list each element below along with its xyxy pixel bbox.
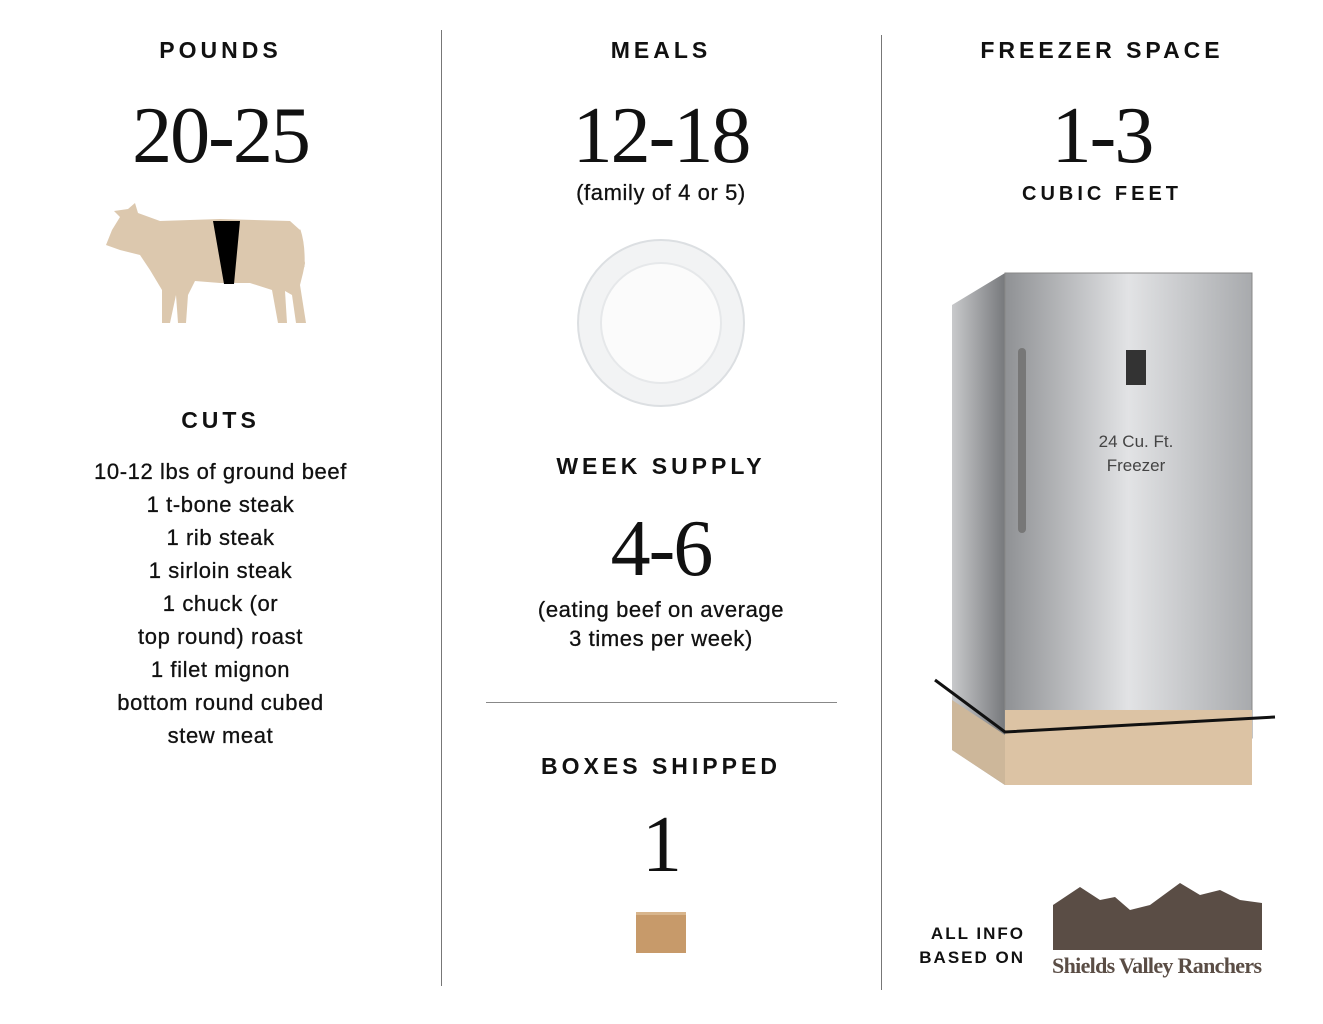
text: all info based on	[919, 924, 1025, 967]
heading: meals: MEALS	[611, 37, 711, 63]
icon: box	[636, 912, 686, 953]
text: all info based on: BASED ON	[919, 948, 1025, 967]
text: cuts list	[94, 459, 347, 748]
heading: freezer space: FREEZER SPACE	[980, 37, 1224, 63]
number: meals: 12-18	[573, 92, 749, 180]
logo: shields valley ranchers	[1052, 883, 1262, 978]
number: freezer: 1-3	[1052, 92, 1152, 180]
text: cuts list: 1 sirloin steak	[149, 558, 292, 583]
text: eating beef: (eating beef on average	[538, 597, 784, 622]
icon: cow	[106, 203, 306, 323]
text: all info based on: ALL INFO	[931, 924, 1025, 943]
logo: shields valley ranchers: Shields Valley Ranchers	[1052, 953, 1262, 978]
text: cuts list: 1 filet mignon	[151, 657, 290, 682]
freezer image: 24 Cu. Ft.	[1099, 432, 1173, 451]
heading: cuts: CUTS	[181, 407, 260, 433]
text: cuts list: 1 chuck (or	[163, 591, 278, 616]
freezer image: Freezer	[1107, 456, 1166, 475]
number: pounds: 20-25	[132, 92, 309, 180]
text: eating beef: 3 times per week)	[569, 626, 753, 651]
text: cuts list: top round) roast	[138, 624, 303, 649]
number: boxes: 1	[642, 801, 680, 889]
freezer image	[934, 272, 1276, 785]
text: cuts list: 10-12 lbs of ground beef	[94, 459, 347, 484]
text: cuts list: 1 t-bone steak	[147, 492, 294, 517]
heading: pounds: POUNDS	[159, 37, 282, 63]
text: cuts list: 1 rib steak	[166, 525, 275, 550]
number: week supply: 4-6	[611, 505, 711, 593]
text: eating beef	[538, 597, 784, 651]
text: cuts list: stew meat	[168, 723, 273, 748]
text: family: (family of 4 or 5)	[576, 180, 746, 205]
icon: plate	[577, 239, 745, 407]
text: cuts list: bottom round cubed	[117, 690, 324, 715]
heading: week supply: WEEK SUPPLY	[556, 453, 766, 479]
heading: cubic feet: CUBIC FEET	[1022, 183, 1182, 205]
heading: boxes shipped: BOXES SHIPPED	[541, 753, 781, 779]
